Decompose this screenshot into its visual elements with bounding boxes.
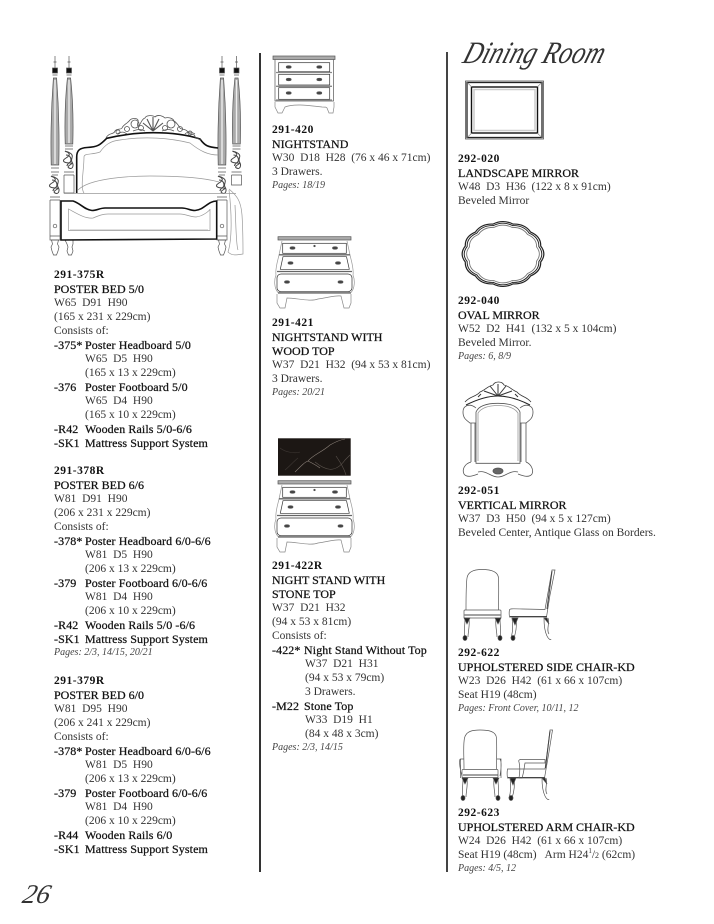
block: 291-378R poster bed 6/6: -SK1: [54, 632, 80, 646]
block: 291-375R poster bed 5/0: (165 x 10 x 229cm): [85, 409, 176, 421]
block: 291-379R poster bed 6/0: W81 D5 H90: [85, 759, 153, 771]
block: 291-375R poster bed 5/0: (165 x 13 x 229cm): [85, 367, 176, 379]
block: 291-420 nightstand: [272, 124, 430, 191]
block: 292-051 vertical mirror: VERTICAL MIRROR: [458, 498, 567, 512]
block: 291-421 nightstand with wood top: 3 Drawers.: [272, 373, 322, 385]
block: 291-378R poster bed 6/6: W81 D4 H90: [85, 591, 153, 603]
block: 291-422R night stand with stone top: (94 x 53 x 79cm): [305, 672, 384, 684]
back and front posts: [49, 56, 242, 255]
block: 291-379R poster bed 6/0: Consists of:: [54, 731, 109, 743]
block: 291-375R poster bed 5/0: W65 D5 H90: [85, 353, 153, 365]
block: 291-375R poster bed 5/0: -SK1: [54, 436, 80, 450]
block: 291-375R poster bed 5/0: [54, 269, 208, 450]
block: 291-379R poster bed 6/0: Mattress Support System: [85, 842, 208, 856]
block: 291-378R poster bed 6/6: (206 x 10 x 229cm): [85, 605, 176, 617]
footboard: [61, 201, 217, 240]
block: 291-378R poster bed 6/6: 291-378R: [54, 465, 105, 477]
block: 291-422R night stand with stone top: -M22: [272, 699, 299, 713]
block: 292-622 upholstered side chair: [458, 647, 635, 714]
block: 291-379R poster bed 6/0: -379: [54, 786, 76, 800]
block: 291-420 nightstand: Pages: 18/19: [272, 180, 325, 191]
block: 292-051 vertical mirror: Beveled Center, Antique Glass on Borders.: [458, 527, 656, 539]
block: 292-622 upholstered side chair: W23 D26 H42 (61 x 66 x 107cm): [458, 675, 622, 687]
block: 291-421 nightstand with wood top: WOOD TOP: [272, 344, 335, 358]
block: 292-020 landscape mirror: W48 D3 H36 (122 x 8 x 91cm): [458, 181, 611, 193]
crown carving: [106, 115, 201, 140]
block: 291-375R poster bed 5/0: W65 D91 H90: [54, 297, 127, 309]
block: 291-379R poster bed 6/0: -SK1: [54, 842, 80, 856]
block: 292-020 landscape mirror: 292-020: [458, 153, 500, 165]
block: 291-422R night stand with stone top: 291-422R: [272, 560, 323, 572]
block: 292-623 upholstered arm chair: Seat H19 (48cm) Arm H241/2 (62cm): [458, 847, 635, 861]
block: 291-421 nightstand with wood top: NIGHTSTAND WITH: [272, 330, 382, 344]
headboard: [77, 133, 218, 193]
block: 291-378R poster bed 6/6: [54, 465, 211, 658]
block: 291-422R night stand with stone top: [272, 560, 427, 753]
block: 292-622 upholstered side chair: Pages: Front Cover, 10/11, 12: [458, 703, 579, 714]
block: 291-379R poster bed 6/0: (206 x 13 x 229cm): [85, 773, 176, 785]
block: 292-051 vertical mirror: 292-051: [458, 485, 500, 497]
block: 291-375R poster bed 5/0: -375*: [54, 338, 82, 352]
block: 291-422R night stand with stone top: 3 Drawers.: [305, 686, 355, 698]
block: 291-379R poster bed 6/0: W81 D4 H90: [85, 801, 153, 813]
block: 291-422R night stand with stone top: Night Stand Without Top: [304, 643, 427, 657]
block: 291-422R night stand with stone top: Stone Top: [304, 699, 354, 713]
block: 292-040 oval mirror: 292-040: [458, 295, 500, 307]
block: 291-379R poster bed 6/0: Wooden Rails 6/0: [85, 828, 172, 842]
block: 292-622 upholstered side chair: Seat H19 (48cm): [458, 689, 537, 701]
block: 291-375R poster bed 5/0: POSTER BED 5/0: [54, 282, 144, 296]
block: 291-421 nightstand with wood top: 291-421: [272, 317, 314, 329]
column divider: left: [258, 53, 260, 872]
block: 291-379R poster bed 6/0: W81 D95 H90: [54, 703, 127, 715]
block: 291-378R poster bed 6/6: W81 D91 H90: [54, 493, 127, 505]
block: 291-379R poster bed 6/0: -R44: [54, 828, 78, 842]
block: 291-422R night stand with stone top: W37 D21 H32: [272, 602, 345, 614]
block: 292-622 upholstered side chair: 292-622: [458, 647, 500, 659]
block: 291-379R poster bed 6/0: Poster Headboard 6/0-6/6: [85, 744, 211, 758]
block: 291-375R poster bed 5/0: Consists of:: [54, 325, 109, 337]
page number: 26: [20, 879, 54, 909]
block: 291-378R poster bed 6/6: -378*: [54, 534, 82, 548]
block: 292-040 oval mirror: Pages: 6, 8/9: [458, 351, 511, 362]
block: 291-421 nightstand with wood top: Pages: 20/21: [272, 387, 325, 398]
block: 291-379R poster bed 6/0: (206 x 10 x 229cm): [85, 815, 176, 827]
block: 292-020 landscape mirror: LANDSCAPE MIRROR: [458, 166, 579, 180]
block: 291-420 nightstand: 3 Drawers.: [272, 166, 322, 178]
block: 291-375R poster bed 5/0: Poster Footboard 5/0: [85, 380, 188, 394]
block: 291-378R poster bed 6/6: (206 x 231 x 229cm): [54, 507, 150, 519]
block: 292-622 upholstered side chair: UPHOLSTERED SIDE CHAIR-KD: [458, 660, 635, 674]
block: 291-421 nightstand with wood top: [272, 317, 430, 398]
block: 292-623 upholstered arm chair: W24 D26 H42 (61 x 66 x 107cm): [458, 835, 622, 847]
block: 291-420 nightstand: NIGHTSTAND: [272, 137, 348, 151]
mattress and bedcover: [64, 192, 236, 194]
block: 291-422R night stand with stone top: NIGHT STAND WITH: [272, 573, 385, 587]
block: 291-420 nightstand: 291-420: [272, 124, 314, 136]
block: 291-379R poster bed 6/0: (206 x 241 x 229cm): [54, 717, 150, 729]
block: 291-375R poster bed 5/0: (165 x 231 x 229cm): [54, 311, 150, 323]
block: 292-051 vertical mirror: W37 D3 H50 (94 x 5 x 127cm): [458, 513, 611, 525]
block: 292-623 upholstered arm chair: [458, 807, 635, 874]
block: 292-040 oval mirror: W52 D2 H41 (132 x 5 x 104cm): [458, 323, 616, 335]
block: 291-420 nightstand: W30 D18 H28 (76 x 46 x 71cm): [272, 152, 430, 164]
block: 292-040 oval mirror: OVAL MIRROR: [458, 308, 540, 322]
block: 291-422R night stand with stone top: STONE TOP: [272, 587, 336, 601]
block: 291-375R poster bed 5/0: -R42: [54, 422, 78, 436]
block: 292-623 upholstered arm chair: UPHOLSTERED ARM CHAIR-KD: [458, 820, 635, 834]
block: 291-378R poster bed 6/6: -379: [54, 576, 76, 590]
block: 291-378R poster bed 6/6: Pages: 2/3, 14/15, 20/21: [54, 647, 153, 658]
block: 291-379R poster bed 6/0: Poster Footboard 6/0-6/6: [85, 786, 207, 800]
block: 291-378R poster bed 6/6: W81 D5 H90: [85, 549, 153, 561]
block: 291-378R poster bed 6/6: Wooden Rails 5/0 -6/6: [85, 618, 195, 632]
block: 291-379R poster bed 6/0: -378*: [54, 744, 82, 758]
block: 291-375R poster bed 5/0: -376: [54, 380, 76, 394]
block: 292-623 upholstered arm chair: 292-623: [458, 807, 500, 819]
block: 291-378R poster bed 6/6: (206 x 13 x 229cm): [85, 563, 176, 575]
block: 292-040 oval mirror: [458, 295, 616, 362]
column divider: right: [446, 52, 448, 872]
block: 291-378R poster bed 6/6: Poster Headboard 6/0-6/6: [85, 534, 211, 548]
block: 291-378R poster bed 6/6: Poster Footboard 6/0-6/6: [85, 576, 207, 590]
block: 291-422R night stand with stone top: -422*: [272, 643, 300, 657]
block: 291-375R poster bed 5/0: Wooden Rails 5/0-6/6: [85, 422, 192, 436]
block: 291-422R night stand with stone top: W37 D21 H31: [305, 658, 378, 670]
block: 291-422R night stand with stone top: Consists of:: [272, 630, 327, 642]
block: 292-040 oval mirror: Beveled Mirror.: [458, 337, 531, 349]
block: 291-421 nightstand with wood top: W37 D21 H32 (94 x 53 x 81cm): [272, 359, 430, 371]
block: 291-422R night stand with stone top: Pages: 2/3, 14/15: [272, 742, 343, 753]
block: 292-020 landscape mirror: [458, 153, 611, 207]
block: 291-375R poster bed 5/0: 291-375R: [54, 269, 105, 281]
block: 291-422R night stand with stone top: (94 x 53 x 81cm): [272, 616, 351, 628]
block: 291-379R poster bed 6/0: [54, 675, 211, 856]
section title: Dining Room: Dining Room: [459, 35, 611, 70]
block: 291-378R poster bed 6/6: Consists of:: [54, 521, 109, 533]
block: 291-379R poster bed 6/0: POSTER BED 6/0: [54, 688, 144, 702]
block: 291-378R poster bed 6/6: -R42: [54, 618, 78, 632]
block: 291-375R poster bed 5/0: W65 D4 H90: [85, 395, 153, 407]
block: 291-422R night stand with stone top: W33 D19 H1: [305, 714, 373, 726]
block: 291-422R night stand with stone top: (84 x 48 x 3cm): [305, 728, 378, 740]
block: 291-375R poster bed 5/0: Poster Headboard 5/0: [85, 338, 191, 352]
block: 292-051 vertical mirror: [458, 485, 656, 539]
block: 292-623 upholstered arm chair: Pages: 4/5, 12: [458, 863, 516, 874]
block: 291-375R poster bed 5/0: Mattress Support System: [85, 436, 208, 450]
block: 291-378R poster bed 6/6: POSTER BED 6/6: [54, 478, 144, 492]
block: 291-379R poster bed 6/0: 291-379R: [54, 675, 105, 687]
block: 292-020 landscape mirror: Beveled Mirror: [458, 195, 529, 207]
block: 291-378R poster bed 6/6: Mattress Support System: [85, 632, 208, 646]
